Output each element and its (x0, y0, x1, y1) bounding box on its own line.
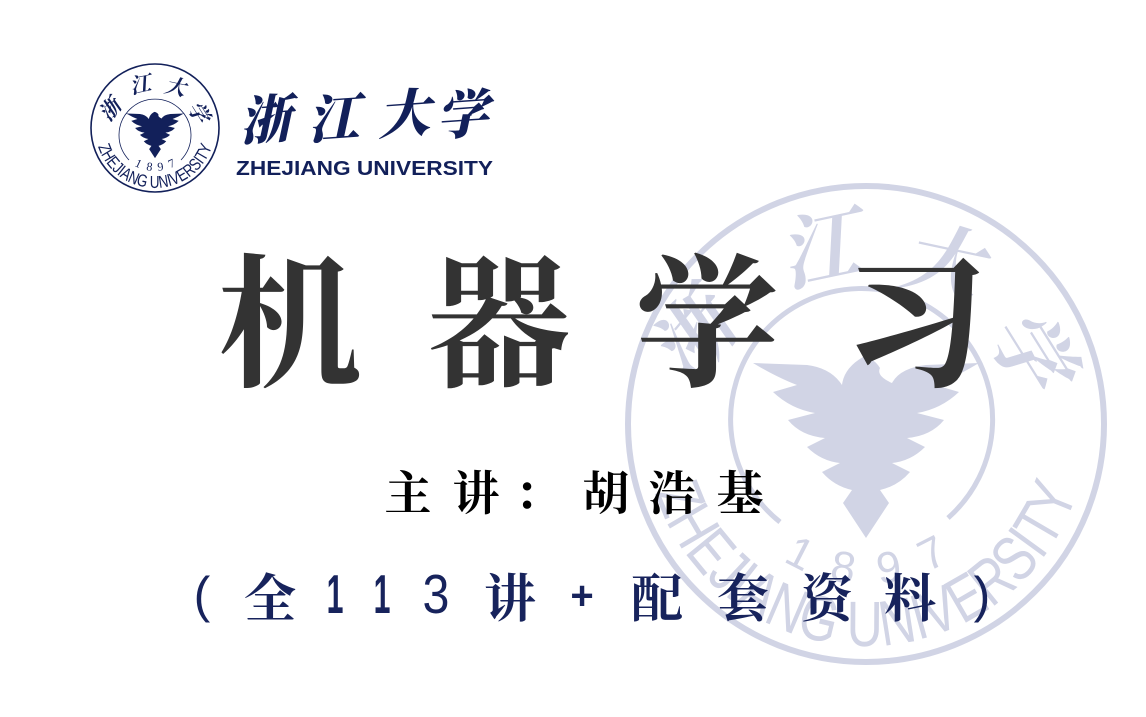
course scope line: 全 (244, 557, 296, 632)
course scope line: 3 (423, 563, 449, 625)
seal Chinese characters: 大 (160, 70, 195, 102)
course scope line (194, 557, 990, 632)
logo: calligraphic university name: 浙 (236, 77, 304, 156)
course scope line: 套 (717, 557, 769, 632)
seal rings (91, 64, 219, 192)
title: 器 (427, 210, 571, 417)
seal Chinese characters: 浙 (95, 86, 126, 128)
title: 机 (218, 210, 362, 417)
seal year: 9 (156, 159, 164, 174)
title: 习 (843, 210, 987, 417)
watermark year: 1 (778, 526, 822, 581)
course scope line: ( (194, 567, 211, 623)
course scope line: 配 (631, 557, 683, 632)
seal year: 8 (146, 159, 154, 174)
watermark university name: ZHEJIANG UNIVERSITY (655, 477, 1072, 647)
seal year (133, 156, 177, 174)
watermark: university seal (625, 175, 1117, 665)
lecturer line: 浩 (648, 457, 696, 524)
course scope line: 讲 (484, 557, 536, 632)
lecturer line: 胡 (582, 457, 630, 524)
watermark Chinese characters: 浙 (634, 249, 753, 408)
watermark inner ring (731, 289, 993, 522)
logo: calligraphic university name (236, 71, 501, 156)
course scope line: + (570, 574, 594, 618)
seal eagle (126, 112, 184, 158)
logo: calligraphic university name: 江 (304, 76, 372, 155)
watermark eagle (753, 357, 979, 538)
seal year: 1 (133, 156, 144, 171)
course scope line: 料 (884, 557, 936, 632)
lecturer line (384, 457, 764, 524)
course scope line: ) (974, 567, 990, 623)
course scope line: 1 (327, 565, 343, 625)
logo: calligraphic university name: 大 (375, 71, 443, 150)
lecturer line: 主 (384, 457, 432, 524)
watermark year: 9 (873, 542, 905, 594)
lecturer line: ： (514, 457, 562, 524)
seal year: 7 (166, 156, 177, 171)
title: 学 (635, 210, 779, 417)
lecturer line: 基 (716, 457, 764, 524)
watermark year: 8 (827, 542, 859, 594)
seal university name: ZHEJIANG UNIVERSITY (98, 142, 211, 188)
course scope line: 资 (801, 557, 859, 632)
seal Chinese characters: 学 (180, 100, 221, 127)
seal Chinese characters (95, 65, 221, 128)
watermark year: 7 (910, 526, 954, 581)
title (218, 210, 987, 417)
watermark Chinese characters: 学 (961, 302, 1117, 405)
watermark Chinese characters (634, 175, 1117, 408)
watermark outer ring (628, 186, 1104, 662)
logo: small university seal (90, 63, 221, 193)
course scope line: 1 (374, 565, 390, 625)
watermark Chinese characters: 大 (884, 197, 1017, 320)
logo: calligraphic university name: 学 (433, 72, 501, 151)
lecturer line: 讲 (452, 457, 500, 524)
seal Chinese characters: 江 (131, 65, 154, 101)
logo: English university name: ZHEJIANG UNIVERSITY (236, 157, 493, 180)
watermark year (778, 526, 954, 594)
watermark Chinese characters: 江 (784, 175, 868, 310)
